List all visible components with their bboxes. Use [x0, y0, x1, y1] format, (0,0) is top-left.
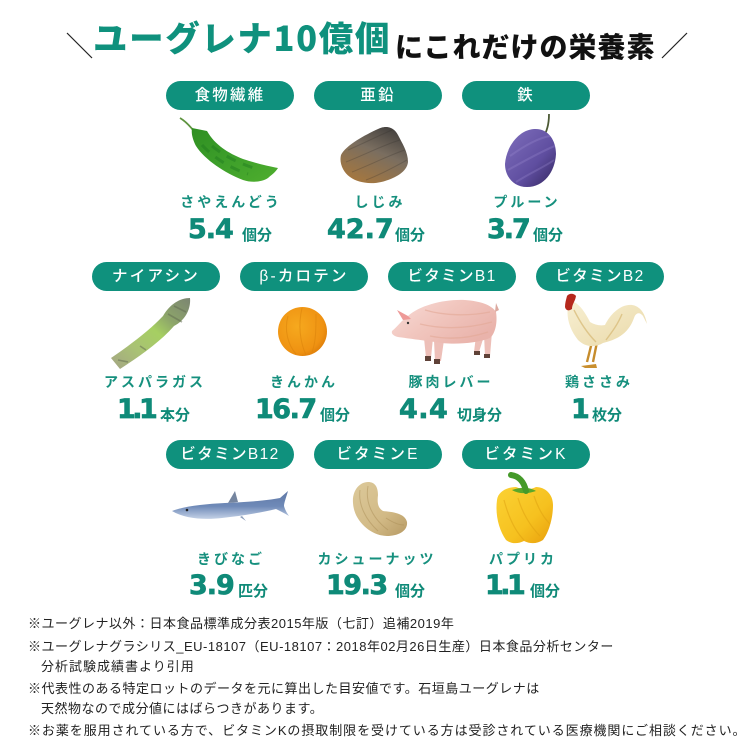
pill: ビタミンB12: ビタミンB12: [180, 446, 280, 463]
icon: kumquat: [278, 307, 327, 356]
icon: yellow bell pepper: [496, 472, 553, 544]
pill: ビタミンB12: [166, 440, 294, 469]
pill: ビタミンB1: ビタミンB1: [407, 268, 497, 285]
footnote 3: ※代表性のある特定ロットのデータを元に算出した目安値です。石垣島ユーグレナは: [28, 681, 540, 696]
food name: きびなご: きびなご: [197, 549, 265, 569]
pill: ナイアシン: ナイアシン: [112, 268, 200, 285]
value: 1.1本分: 本分: [160, 404, 190, 425]
value: 5.4個分: 5.4: [188, 214, 233, 245]
value: 16.7個分: [255, 394, 350, 425]
pill: β-カロテン: [240, 262, 368, 291]
footnote 1: ※ユーグレナ以外：日本食品標準成分表2015年版（七訂）追補2019年: [28, 616, 454, 631]
title black part: にこれだけの栄養素: [395, 26, 655, 66]
food name: カシューナッツ: カシューナッツ: [318, 549, 436, 569]
pill: 鉄: [462, 81, 590, 110]
pill: 鉄: 鉄: [517, 87, 535, 104]
value: 19.3個分: 19.3: [326, 570, 387, 601]
food name: パプリカ: パプリカ: [489, 549, 557, 569]
pill: ビタミンE: [314, 440, 442, 469]
value: 1.1個分: 1.1: [485, 570, 522, 601]
icon: cashew: [352, 482, 408, 536]
food name: しじみ: しじみ: [354, 192, 406, 212]
footnote 3 continued: 天然物なので成分値にはばらつきがあります。: [41, 701, 323, 716]
food name: さやえんどう: さやえんどう: [180, 192, 282, 212]
value: 1枚分: [571, 394, 622, 425]
value: 42.7個分: 個分: [395, 224, 425, 245]
food name: プルーン: プルーン: [493, 192, 561, 212]
value: 1.1個分: 個分: [530, 580, 560, 601]
value: 3.9匹分: [189, 570, 268, 601]
value: 4.4切身分: [399, 394, 502, 425]
pill: ビタミンB1: [388, 262, 516, 291]
food name: 豚肉レバー: 豚肉レバー: [408, 372, 494, 392]
icon: pig: [392, 300, 499, 364]
value: 4.4切身分: 4.4: [399, 394, 448, 425]
value: 3.7個分: 3.7: [487, 214, 529, 245]
food name: アスパラガス: アスパラガス: [104, 372, 206, 392]
footnote 2: ※ユーグレナグラシリス_EU-18107（EU-18107：2018年02月26日生産）日本食品分析センター: [28, 639, 614, 654]
value: 1枚分: 1: [571, 394, 590, 425]
title slash left: [66, 32, 92, 58]
value: 1枚分: 枚分: [592, 404, 622, 425]
pill: ビタミンE: ビタミンE: [336, 446, 420, 463]
pill: ビタミンB2: [536, 262, 664, 291]
icon: snow pea: [180, 117, 278, 182]
value: 5.4個分: 個分: [242, 224, 272, 245]
pill: ナイアシン: [92, 262, 220, 291]
icon: asparagus: [111, 298, 190, 369]
value: 3.7個分: [487, 214, 563, 245]
value: 1.1個分: [485, 570, 560, 601]
value: 42.7個分: [327, 214, 425, 245]
value: 5.4個分: [188, 214, 272, 245]
pill: 亜鉛: 亜鉛: [360, 87, 396, 104]
value: 42.7個分: 42.7: [327, 214, 394, 245]
value: 16.7個分: 個分: [320, 404, 350, 425]
icon: clam: [340, 127, 408, 184]
food name: きんかん: きんかん: [270, 372, 338, 392]
footnote 4: ※お薬を服用されている方で、ビタミンKの摂取制限を受けている方は受診されている医療機関にご相談ください。: [28, 723, 746, 738]
value: 16.7個分: 16.7: [255, 394, 316, 425]
food name: 鶏ささみ: 鶏ささみ: [565, 372, 633, 392]
title: [66, 11, 688, 66]
pill: ビタミンB2: ビタミンB2: [555, 268, 645, 285]
value: 1.1本分: [117, 394, 190, 425]
value: 3.9匹分: 3.9: [189, 570, 234, 601]
value: 19.3個分: [326, 570, 425, 601]
icon: prune: [505, 114, 556, 187]
icon: rooster: [565, 294, 647, 368]
pill: ビタミンK: ビタミンK: [484, 446, 568, 463]
value: 3.7個分: 個分: [533, 224, 563, 245]
value: 19.3個分: 個分: [395, 580, 425, 601]
pill: 食物繊維: 食物繊維: [195, 87, 265, 104]
pill: 食物繊維: [166, 81, 294, 110]
icon: fish: [172, 491, 289, 521]
value: 1.1本分: 1.1: [117, 394, 154, 425]
value: 4.4切身分: 切身分: [457, 404, 502, 425]
title teal part: ユーグレナ10億個: [93, 11, 391, 61]
title slash right: [662, 32, 688, 58]
value: 3.9匹分: 匹分: [238, 580, 268, 601]
pill: β-カロテン: β-カロテン: [259, 268, 349, 285]
footnote 2 continued: 分析試験成績書より引用: [41, 659, 195, 674]
pill: ビタミンK: [462, 440, 590, 469]
pill: 亜鉛: [314, 81, 442, 110]
